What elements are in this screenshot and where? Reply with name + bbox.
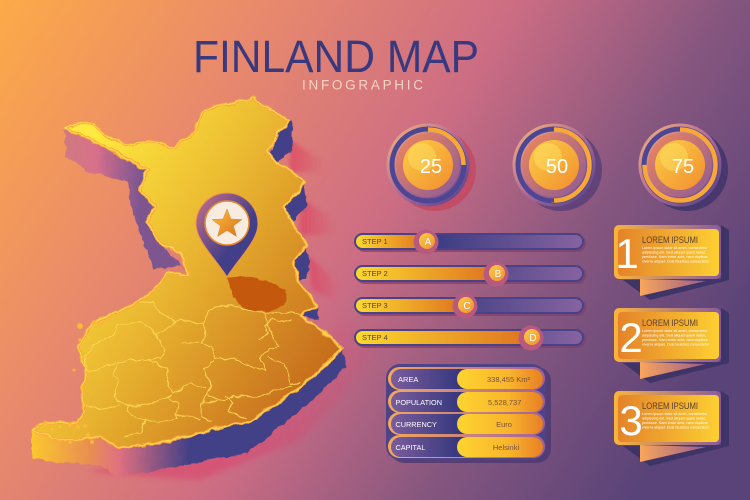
card number: 2 [619, 314, 643, 361]
map extrusion: east side [270, 120, 310, 279]
gauge: 75 [638, 124, 728, 211]
card number: 1 [615, 230, 639, 277]
lake shadow area [227, 276, 287, 312]
card body text: Lorem ipsum dolor sit amet, consectetur [642, 246, 708, 250]
knob B [484, 262, 508, 286]
card 1 [614, 225, 729, 300]
card body text: pendisse. Nam tortor ante, nam dapibus [642, 421, 708, 425]
row: population: 5,528,737 [488, 398, 521, 407]
card 2 [614, 308, 729, 383]
map of Finland [31, 98, 378, 480]
knob D: D [529, 333, 537, 344]
archipelago islands [36, 318, 110, 444]
row: currency: CURRENCY [396, 420, 437, 429]
knob A [414, 230, 438, 254]
subtitle: INFOGRAPHIC [302, 78, 423, 92]
card body text [642, 412, 710, 430]
gauge value: 50 [546, 156, 568, 178]
card body text: viverra aliquet. Duis faucibus consectetur [642, 342, 710, 346]
map extrusion: south side [31, 292, 345, 477]
gauge value: 25 [420, 156, 442, 178]
row: population: POPULATION [396, 398, 442, 407]
slider: step 1 [354, 230, 586, 254]
card body text [642, 329, 710, 346]
knob D [518, 326, 544, 350]
row: area [388, 367, 545, 390]
card body text: viverra aliquet. Duis faucibus consectetur [642, 260, 710, 264]
row: area: 338,455 Km² [487, 375, 530, 384]
knob C: C [463, 301, 471, 312]
map body [31, 98, 345, 477]
gauge: 50 [512, 124, 602, 211]
card body text [642, 246, 710, 264]
pin disc [205, 201, 249, 245]
card body text: adipiscing elit. Sed aliquet quam netus, [642, 416, 706, 420]
slider: step 4 [354, 326, 586, 350]
card body text: pendisse. Nam tortor ante, nam dapibus [642, 338, 708, 342]
card body text: adipiscing elit. Sed aliquet quam netus, [642, 334, 706, 338]
row: capital: CAPITAL [396, 443, 425, 452]
row: currency [388, 412, 545, 435]
card body text: adipiscing elit. Sed aliquet quam netus, [642, 250, 706, 254]
map cast shadows [90, 140, 378, 480]
row: area: AREA [398, 375, 418, 384]
row: population [388, 390, 545, 413]
gauge: 25 [386, 124, 476, 211]
knob C [452, 294, 478, 318]
step label: STEP 2 [362, 269, 388, 278]
row: currency: Euro [496, 420, 512, 429]
step label: STEP 3 [362, 301, 388, 310]
knob A: A [425, 237, 432, 248]
step label: STEP 4 [362, 333, 388, 342]
map land surface [33, 98, 343, 448]
card body text: Lorem ipsum dolor sit amet, consectetur [642, 329, 708, 333]
map coast highlight [33, 98, 343, 448]
row: capital: Helsinki [493, 443, 519, 452]
facts table [386, 364, 551, 463]
card body text: Lorem ipsum dolor sit amet, consectetur [642, 412, 708, 416]
slider: step 3 [354, 294, 586, 318]
location pin [196, 193, 258, 277]
step label: STEP 1 [362, 237, 388, 246]
slider: step 2 [354, 262, 586, 286]
card number: 3 [619, 397, 643, 444]
map extrusion: north-west side [65, 128, 190, 275]
card heading: LOREM IPSUMI [642, 401, 698, 411]
row: capital [388, 435, 545, 458]
gauge value: 75 [672, 156, 694, 178]
title: FINLAND MAP [193, 31, 479, 82]
region borders [85, 302, 302, 437]
card body text: pendisse. Nam tortor ante, nam dapibus [642, 255, 708, 259]
card 3 [614, 391, 729, 466]
card heading: LOREM IPSUMI [642, 318, 698, 328]
card body text: viverra aliquet. Duis faucibus consectetur [642, 426, 710, 430]
knob B: B [495, 269, 502, 280]
card heading: LOREM IPSUMI [642, 235, 698, 245]
icon: star [212, 209, 242, 236]
